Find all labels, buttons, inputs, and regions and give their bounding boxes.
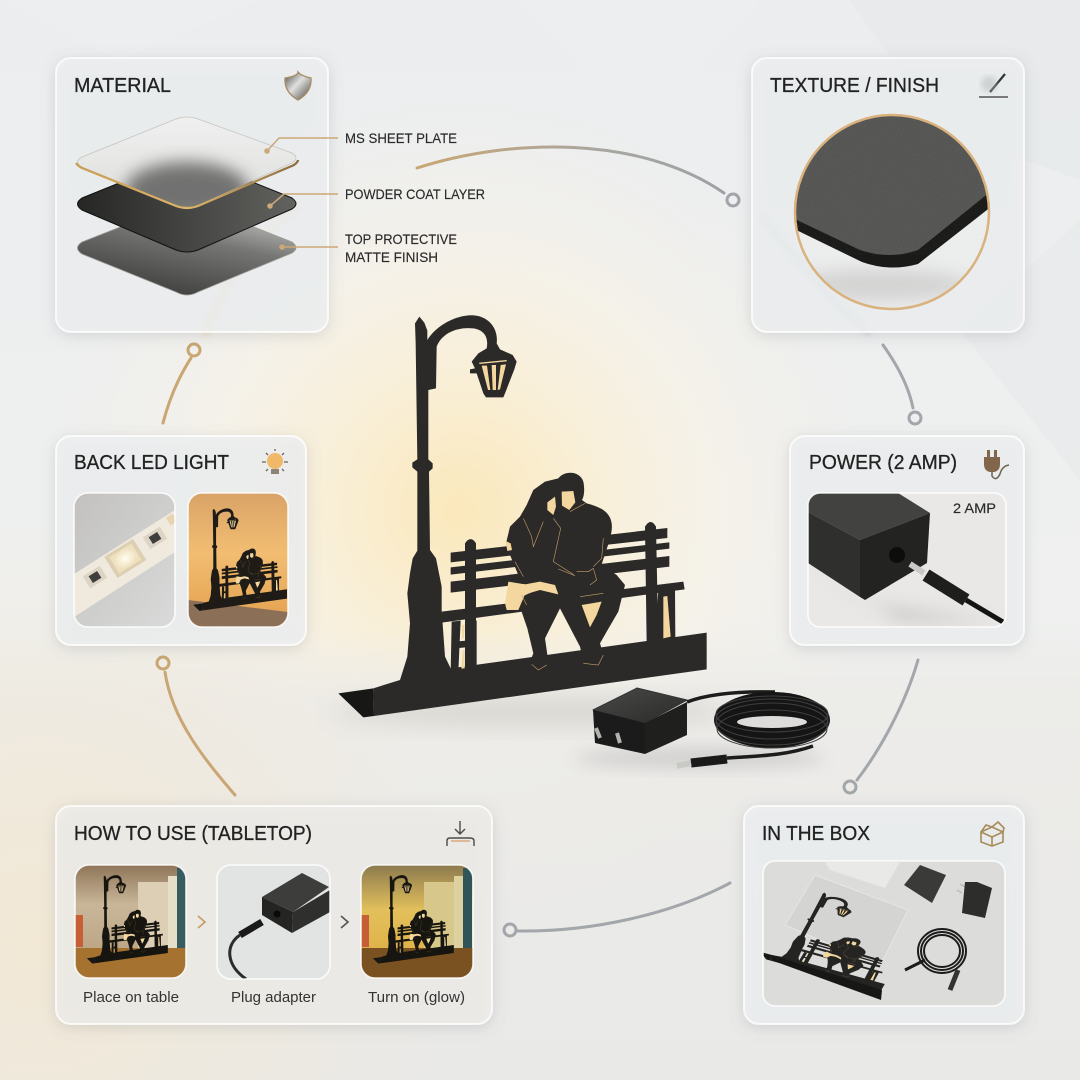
heading: texture finish: TEXTURE / FINISH	[770, 75, 939, 97]
heading: how to use: HOW TO USE (TABLETOP)	[74, 823, 312, 845]
heading: in the box: IN THE BOX	[762, 823, 870, 845]
panel: texture finish	[752, 58, 1024, 332]
connector: power to box	[844, 660, 918, 793]
layer: sheet plate	[76, 117, 298, 218]
panel: back led light	[56, 436, 306, 645]
leader lines	[265, 138, 338, 249]
connector: box to how to use	[504, 883, 730, 936]
step 3: turn on glow	[361, 865, 473, 978]
icon: tabletop	[447, 821, 474, 846]
icon: shield	[285, 72, 311, 100]
step 2: plug adapter	[217, 865, 330, 979]
arrow: step 1 to 2	[198, 916, 205, 928]
texture circle close-up	[794, 114, 990, 310]
caption: plug adapter: Plug adapter	[231, 990, 316, 1006]
panel: in the box	[744, 806, 1024, 1024]
label: top protective matte finish: MATTE FINISH	[345, 249, 438, 265]
icon: pencil on texture	[979, 74, 1008, 97]
central product: lamp silhouette	[330, 315, 730, 726]
icon: light bulb	[262, 449, 288, 474]
step 1: place on table	[75, 865, 186, 978]
connector: texture to power	[883, 345, 921, 424]
heading: material: MATERIAL	[74, 75, 171, 97]
heading: power 2 amp: POWER (2 AMP)	[809, 452, 957, 474]
photo: led strip close-up	[74, 493, 178, 627]
arrow: step 2 to 3	[341, 916, 348, 928]
panel: material	[56, 58, 485, 332]
connector: back led to material	[163, 344, 200, 423]
label: MS sheet plate: MS SHEET PLATE	[345, 130, 457, 146]
panel: power	[790, 436, 1024, 645]
panel: how to use	[56, 806, 492, 1024]
icon: plug	[984, 450, 1009, 479]
label: top protective matte finish	[345, 231, 457, 265]
heading: back led light: BACK LED LIGHT	[74, 452, 229, 474]
connector: material to texture	[417, 147, 739, 206]
photo: glowing lamp	[188, 493, 288, 627]
icon: box	[981, 822, 1004, 846]
photo: box contents	[758, 861, 1005, 1006]
layer: powder coat	[78, 158, 296, 252]
connector: how to use to back led	[157, 657, 235, 795]
caption: place on table: Place on table	[83, 990, 179, 1006]
caption: turn on glow: Turn on (glow)	[368, 990, 465, 1006]
central product: adapter and cable	[575, 688, 830, 769]
photo: power adapter jack	[808, 493, 1006, 627]
label: 2 amp: 2 AMP	[953, 500, 996, 516]
layer: bottom matte finish	[78, 203, 296, 295]
label: top protective matte finish: TOP PROTECTIVE	[345, 231, 457, 247]
label: powder coat layer: POWDER COAT LAYER	[345, 186, 485, 202]
